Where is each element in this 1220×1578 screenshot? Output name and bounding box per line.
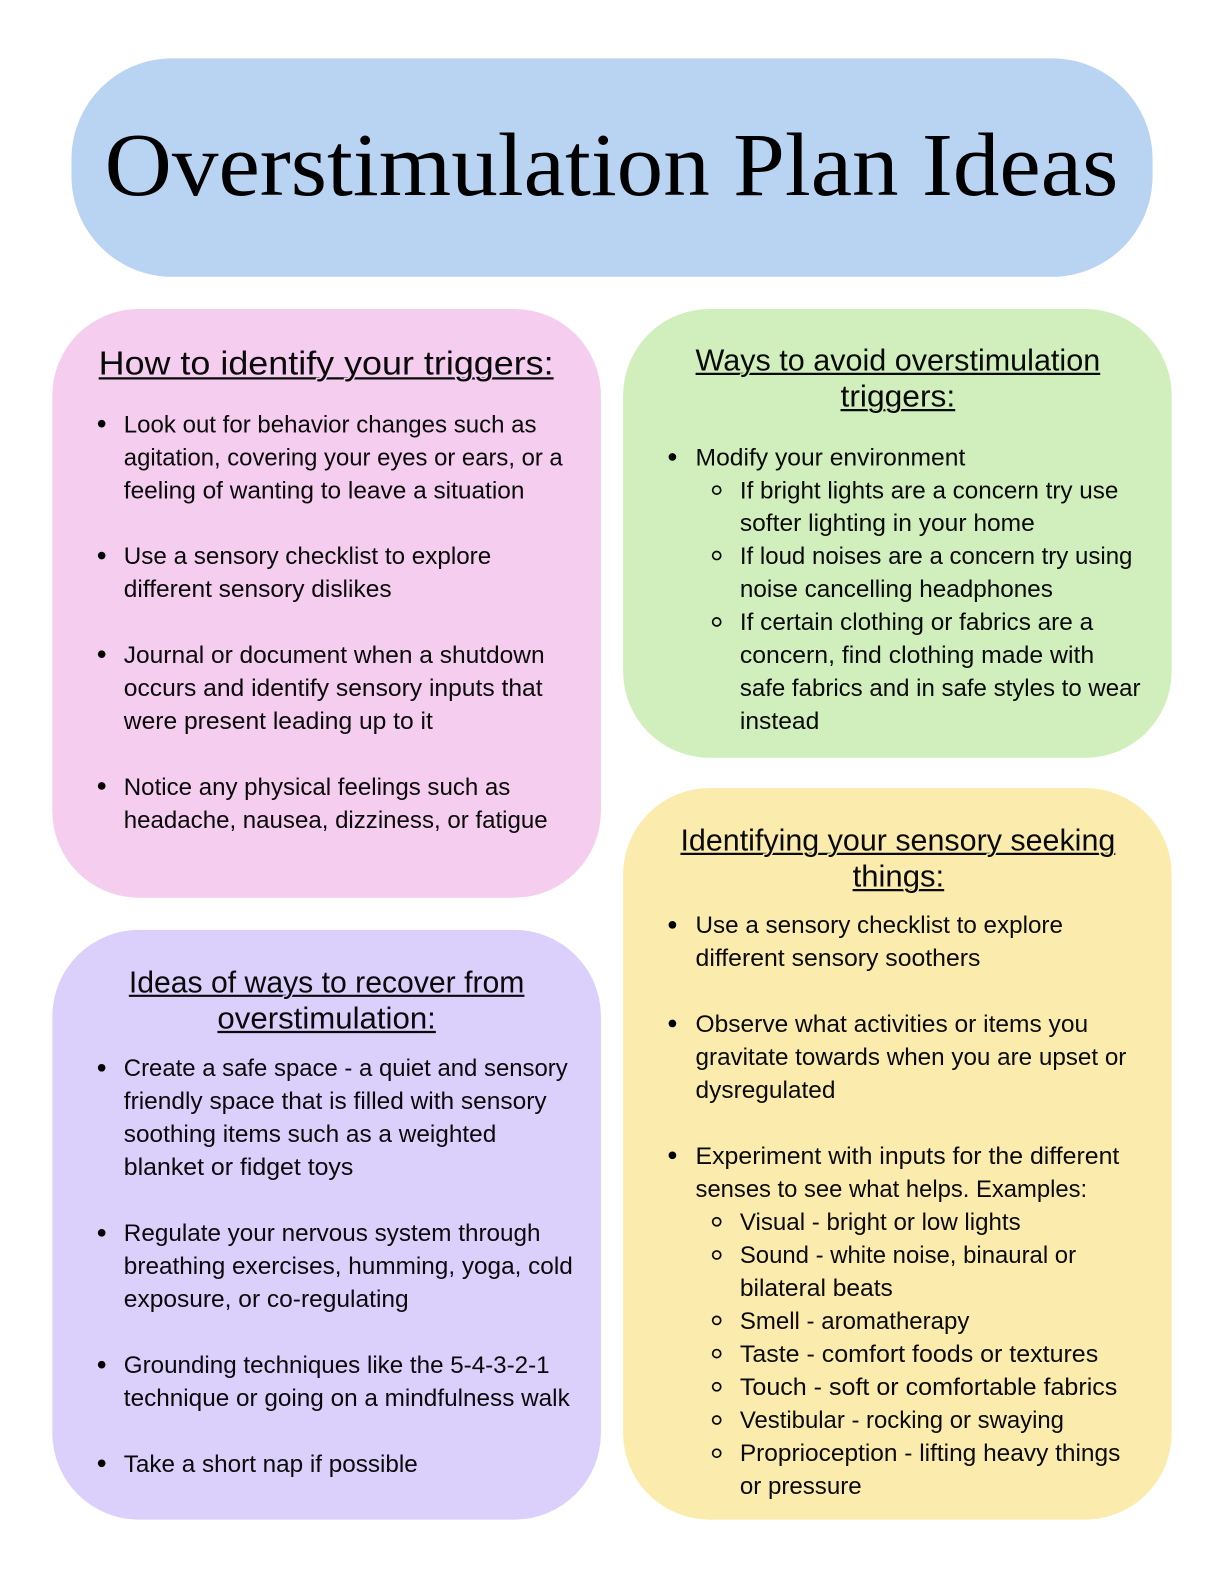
bullet: nervous system [98, 1220, 573, 1313]
bullet: sensory checklist: Use a sensory checklist to explore [124, 543, 491, 570]
bullet: experiment with inputs: senses to see what helps. Examples: [696, 1176, 1087, 1203]
bullet: grounding: Grounding techniques like the 5-4-3-2-1 [124, 1352, 550, 1379]
sub-bullet: loud noises: noise cancelling headphones [740, 576, 1053, 603]
bullet: experiment with inputs: Experiment with inputs for the different [696, 1143, 1120, 1170]
bullet: sensory checklist: Use a sensory checklist to explore [696, 912, 1063, 939]
bullet: journal: Journal or document when a shutdown [124, 642, 545, 669]
sub-bullet: touch: Touch - soft or comfortable fabrics [740, 1374, 1117, 1401]
sub-bullet: taste: Taste - comfort foods or textures [740, 1341, 1098, 1368]
sub-bullet: smell: Smell - aromatherapy [740, 1308, 970, 1335]
heading: identifying sensory seeking: Identifying your sensory seeking [680, 824, 1115, 857]
sub-bullet: loud noises: If loud noises are a concern try using [740, 543, 1132, 570]
heading: ideas of ways to recover: overstimulation: [217, 1002, 436, 1035]
sub-bullet: clothing or fabrics: If certain clothing or fabrics are a [740, 609, 1094, 636]
title banner [71, 58, 1153, 277]
bullet: journal: occurs and identify sensory inputs that [124, 675, 543, 702]
bullet: sensory checklist [98, 543, 491, 603]
bullet: behavior changes [98, 411, 563, 504]
sub-bullet: clothing or fabrics: safe fabrics and in safe styles to wear [740, 675, 1140, 702]
sub-bullet: sound: bilateral beats [740, 1275, 893, 1302]
sub-bullet: clothing or fabrics [713, 609, 1140, 735]
sub-bullet: bright lights: softer lighting in your home [740, 510, 1035, 537]
sub-bullet: loud noises [713, 543, 1132, 603]
bullet: sensory checklist [669, 912, 1063, 972]
sub-bullet: proprioception: or pressure [740, 1473, 862, 1500]
bullet: safe space: Create a safe space - a quiet and sensory [124, 1055, 569, 1082]
bullet: observe activities: Observe what activities or items you [696, 1011, 1088, 1038]
bullet: observe activities: gravitate towards when you are upset or [696, 1044, 1126, 1071]
panel: ideas of ways to recover [52, 930, 601, 1520]
bullet: safe space: soothing items such as a weighted [124, 1121, 496, 1148]
heading: ways to avoid: triggers: [841, 380, 955, 413]
bullet: behavior changes: agitation, covering your eyes or ears, or a [124, 444, 563, 471]
sub-bullet: bright lights [713, 477, 1118, 537]
bullet: modify your environment: Modify your environment [696, 444, 966, 471]
bullet: journal [98, 642, 545, 735]
bullet: behavior changes: Look out for behavior changes such as [124, 411, 537, 438]
bullet: journal: were present leading up to it [123, 708, 433, 735]
bullet: safe space: blanket or fidget toys [124, 1154, 353, 1181]
bullet: grounding [98, 1352, 571, 1412]
panel: ways to avoid overstimulation triggers [623, 309, 1172, 758]
heading: ideas of ways to recover [129, 966, 524, 1035]
sub-bullet: sound [713, 1242, 1076, 1302]
sub-bullet: proprioception [713, 1440, 1120, 1500]
bullet: safe space: friendly space that is filled with sensory [124, 1088, 548, 1115]
title: Overstimulation Plan Ideas [105, 114, 1118, 215]
heading: identifying sensory seeking [680, 824, 1115, 894]
bullet: grounding: technique or going on a mindfulness walk [124, 1385, 571, 1412]
sub-bullet: visual: Visual - bright or low lights [740, 1209, 1021, 1236]
bullet: physical feelings: Notice any physical feelings such as [124, 774, 510, 801]
sub-bullet: sound: Sound - white noise, binaural or [740, 1242, 1076, 1269]
bullet: sensory checklist: different sensory dislikes [124, 576, 392, 603]
panel: how to identify your triggers [52, 309, 601, 898]
bullet: observe activities [669, 1011, 1126, 1104]
bullet: nervous system: Regulate your nervous system through [124, 1220, 541, 1247]
bullet: short nap: Take a short nap if possible [124, 1451, 418, 1478]
bullet: experiment with inputs [669, 1143, 1120, 1203]
bullet: physical feelings: headache, nausea, dizziness, or fatigue [124, 807, 548, 834]
bullet: safe space [98, 1055, 569, 1181]
bullet: nervous system: breathing exercises, humming, yoga, cold [124, 1253, 573, 1280]
panel: identifying your sensory seeking things [623, 788, 1172, 1520]
bullet: sensory checklist: different sensory soothers [696, 945, 980, 972]
heading: identifying sensory seeking: things: [853, 861, 944, 894]
sub-bullet: proprioception: Proprioception - lifting heavy things [740, 1440, 1120, 1467]
heading: ways to avoid [696, 344, 1100, 413]
heading: ideas of ways to recover: Ideas of ways to recover from [129, 966, 524, 999]
heading: ways to avoid: Ways to avoid overstimulation [696, 344, 1100, 377]
bullet: physical feelings [98, 774, 548, 834]
heading: how to identify your triggers: How to identify your triggers: [99, 345, 554, 382]
sub-bullet: vestibular: Vestibular - rocking or swaying [740, 1407, 1064, 1434]
bullet: observe activities: dysregulated [696, 1077, 835, 1104]
bullet: nervous system: exposure, or co-regulating [124, 1286, 409, 1313]
bullet: behavior changes: feeling of wanting to leave a situation [124, 477, 524, 504]
sub-bullet: clothing or fabrics: concern, find clothing made with [740, 642, 1094, 669]
sub-bullet: clothing or fabrics: instead [740, 708, 819, 735]
sub-bullet: bright lights: If bright lights are a concern try use [740, 477, 1118, 504]
